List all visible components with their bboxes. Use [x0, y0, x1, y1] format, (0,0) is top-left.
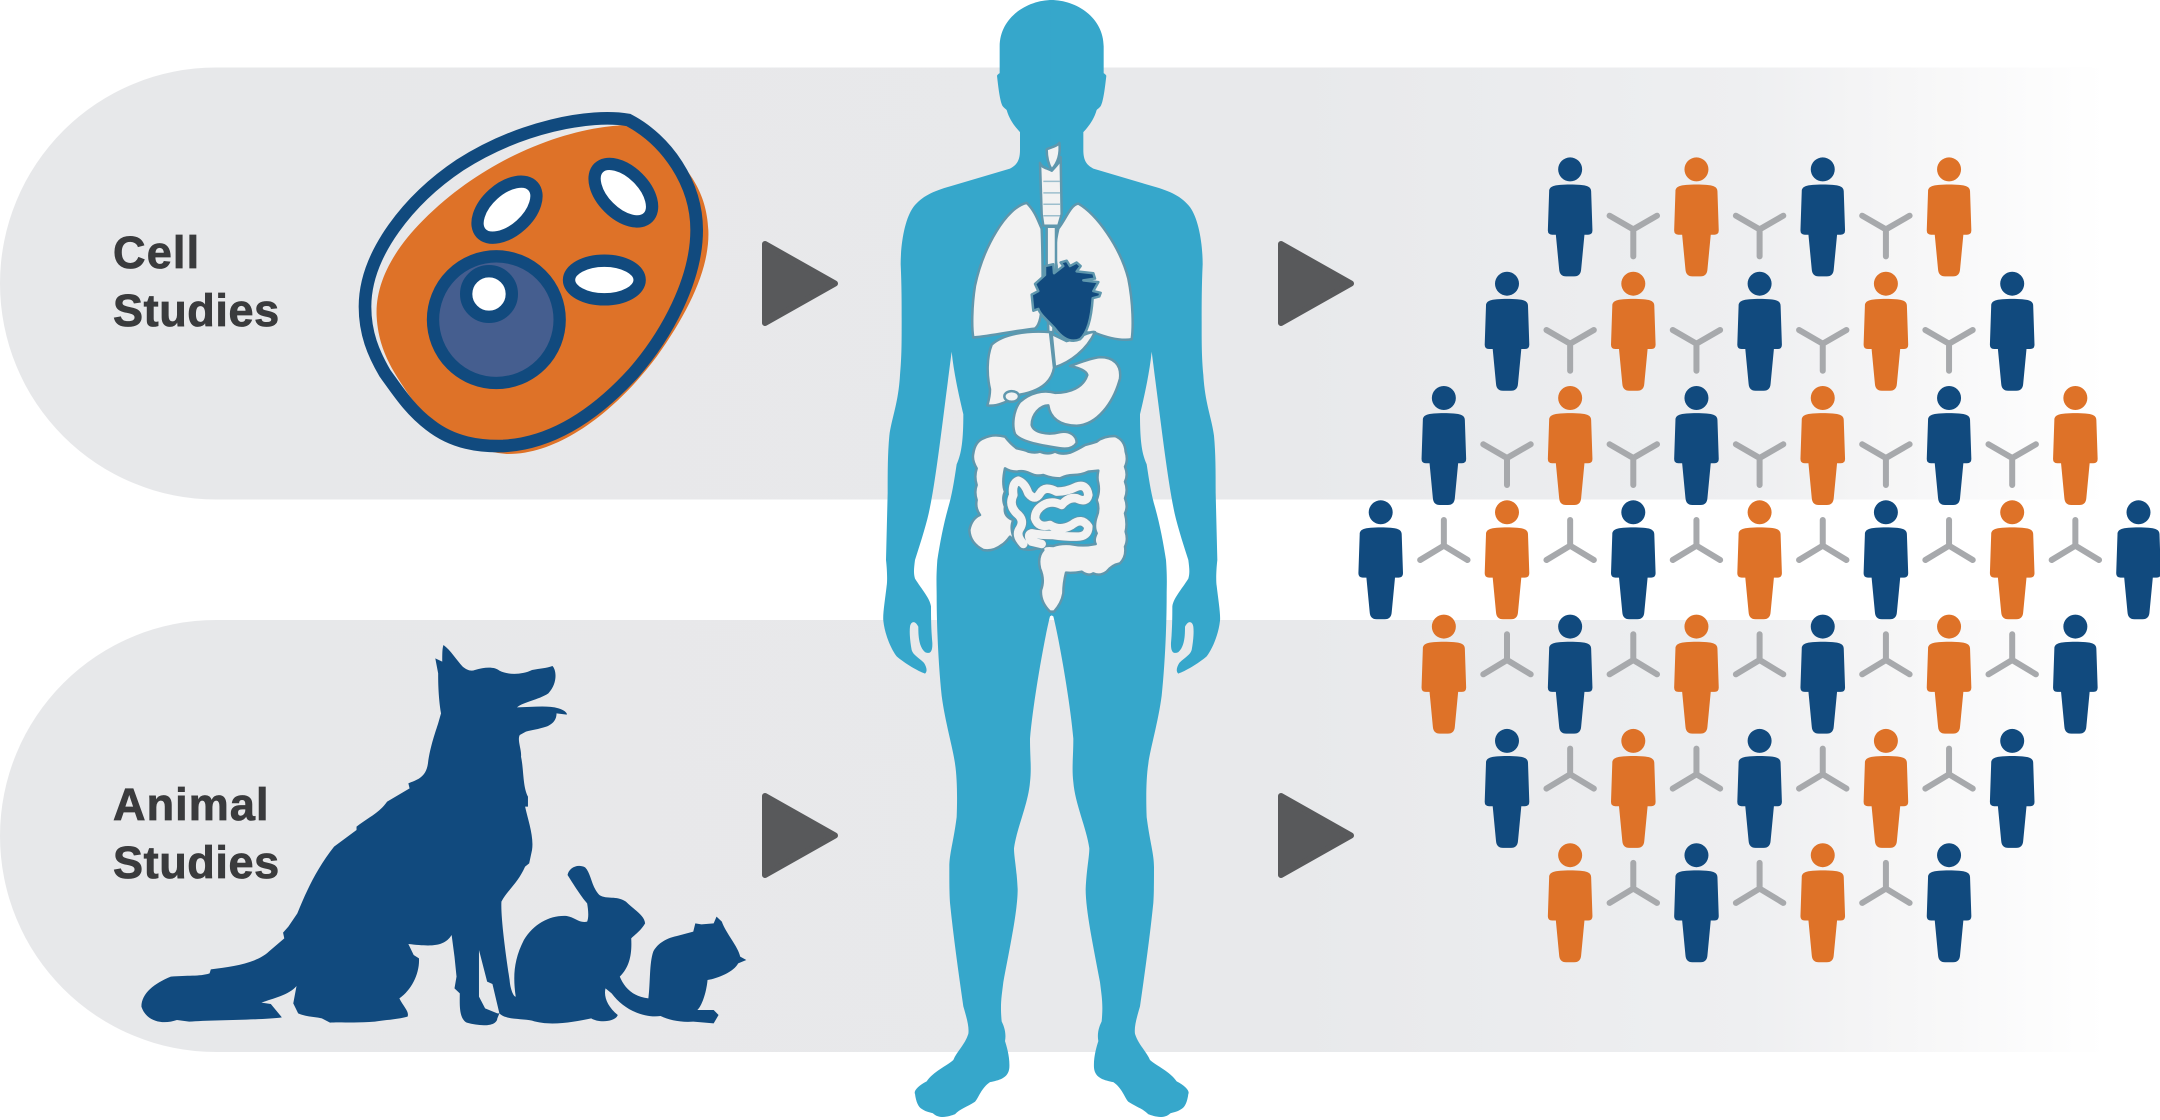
heading: cell studies: Cell [113, 227, 200, 278]
liver [987, 332, 1054, 406]
trachea rings [1043, 181, 1060, 216]
row 6 people [1485, 729, 2034, 848]
row 5 people [1422, 615, 2098, 734]
arrow: human to population, top [1281, 244, 1351, 323]
organs: intestines [969, 435, 1127, 612]
trachea [1040, 157, 1062, 226]
stomach and duodenum [1013, 357, 1120, 449]
heading: animal studies: Studies [113, 837, 280, 888]
arrow: human to population, bottom [1281, 796, 1351, 875]
row 3 people [1422, 386, 2098, 505]
intestinal cavity [1003, 468, 1099, 550]
heart [1032, 261, 1101, 341]
icon: dog, rabbit and squirrel silhouettes [141, 645, 746, 1025]
small intestine outline [1011, 481, 1088, 544]
row 1 people [1548, 157, 1971, 276]
liver left lobe [1052, 332, 1095, 367]
small intestine [1011, 481, 1088, 544]
organs: thorax and abdomen [972, 143, 1133, 449]
row 4 people [1358, 500, 2160, 619]
gallbladder [1004, 391, 1019, 402]
bronchus tube [1047, 227, 1056, 332]
icon: cell [365, 118, 708, 454]
panel: cell studies band [0, 68, 2160, 500]
arrow: cell studies to human [765, 244, 835, 323]
people and antibody population grid [1358, 157, 2160, 962]
human body silhouette [883, 0, 1220, 1117]
thyroid cartilage [1047, 143, 1060, 170]
row 7 people [1548, 843, 1971, 962]
panel: animal studies band [0, 620, 2160, 1052]
right lung [1055, 204, 1133, 340]
left lung [972, 203, 1043, 337]
arrow: animal studies to human [765, 796, 835, 875]
heading: cell studies: Studies [113, 285, 280, 336]
heading: animal studies: Animal [113, 779, 270, 830]
large intestine [969, 435, 1127, 612]
row 2 people [1485, 272, 2034, 391]
